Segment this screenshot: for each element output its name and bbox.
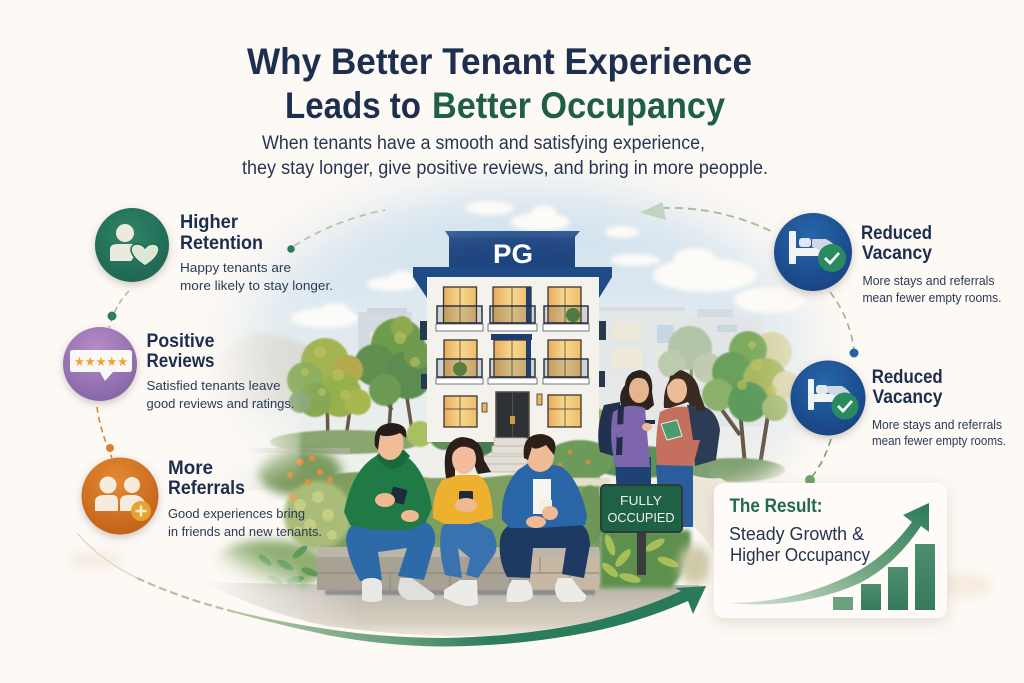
stone bench wall [317,547,599,595]
heading: Reduced [861,222,932,244]
result text: Steady Growth & [729,524,864,544]
standing student: coral top with backpack [656,370,720,527]
heading [872,366,943,408]
clouds [291,201,806,328]
description: mean fewer empty rooms. [872,434,1006,448]
heading: Referrals [168,477,245,499]
description: mean fewer empty rooms. [862,291,1002,305]
icon: bed with check [790,360,866,436]
item: reduced vacancy upper [774,213,1002,305]
connector: top dashed arc with arrow [287,202,775,253]
heading [861,222,932,264]
icon: bed with check [774,213,852,291]
trees left [286,315,427,432]
subtitle: they stay longer, give positive reviews, and bring in more peopple. [242,158,768,179]
icon: two people with plus [82,458,158,534]
garden hedge behind seated students [320,440,614,550]
seated student: blue hoodie [500,434,590,602]
title: Leads to [285,85,421,126]
heading: Reduced [872,366,943,388]
heading: Vacancy [862,242,932,264]
connector: vacancy to vacancy [830,292,858,358]
fully occupied sign: OCCUPIED [608,510,674,525]
subtitle: When tenants have a smooth and satisfying experience, [262,133,705,154]
facade [427,277,599,442]
door [496,392,529,438]
roof [413,267,612,298]
description: Satisfied tenants leave [146,378,280,393]
bar chart [833,544,935,610]
sky [200,170,840,490]
item: positive reviews [63,327,294,411]
illustrated scene [200,170,840,606]
connector: vacancy to result [805,439,831,485]
heading: Retention [180,232,263,254]
windows [444,287,581,427]
description [146,378,294,411]
item: higher retention [95,208,333,293]
heading [146,330,215,372]
side shutters [420,321,606,389]
trees right [658,326,800,465]
subtitle [242,133,768,179]
hedges behind building [270,408,785,482]
growth arrow [728,503,929,604]
garden foliage right [599,530,711,588]
fully occupied sign: FULLY [620,493,662,508]
title: Better Occupancy [432,85,725,126]
heading [180,211,263,254]
description: More stays and referrals [862,274,994,288]
title [247,41,752,126]
item: reduced vacancy lower [790,360,1006,448]
heading: Vacancy [872,386,943,408]
description [862,274,1002,305]
garden border wall [250,448,350,453]
panel: the result [714,483,947,618]
description: more likely to stay longer. [180,278,333,293]
card [714,483,947,618]
wall lamps [482,394,542,412]
item: more referrals [82,457,322,539]
description [872,418,1006,448]
result text: Higher Occupancy [730,545,870,565]
heading: Higher [180,211,238,233]
fully occupied sign [601,485,682,575]
balconies [437,306,588,377]
seated student: green hoodie [344,423,435,602]
heading: Reviews [146,350,215,372]
big sweep arrow to result [77,533,706,646]
description [168,506,322,539]
icon: review bubble with stars [63,327,137,401]
seated student: yellow sweater [433,437,497,606]
PG building [413,231,612,472]
ground path [205,582,700,636]
icon: person with heart [95,208,169,282]
description [180,260,333,293]
background buildings [358,307,765,432]
description: good reviews and ratings. [146,396,294,411]
PG sign: PG [493,239,533,269]
connector: retention to reviews [108,291,129,328]
description: More stays and referrals [872,418,1002,432]
description: in friends and new tenants. [168,524,322,539]
heading [168,457,245,499]
standing student: purple top [598,370,655,484]
result text [729,524,870,565]
heading: More [168,457,213,479]
icon: review bubble with stars: ★★★★★ [74,355,128,370]
title: Why Better Tenant Experience [247,41,752,82]
distant hill [232,333,307,406]
path beside sign [693,475,728,551]
connector: reviews to referrals [97,407,114,458]
garden foliage left [212,448,352,590]
background smudges [67,550,991,597]
description: Good experiences bring [168,506,305,521]
heading: Positive [146,330,215,352]
description: Happy tenants are [180,260,291,275]
steps [476,438,534,472]
result heading: The Result: [730,496,822,517]
